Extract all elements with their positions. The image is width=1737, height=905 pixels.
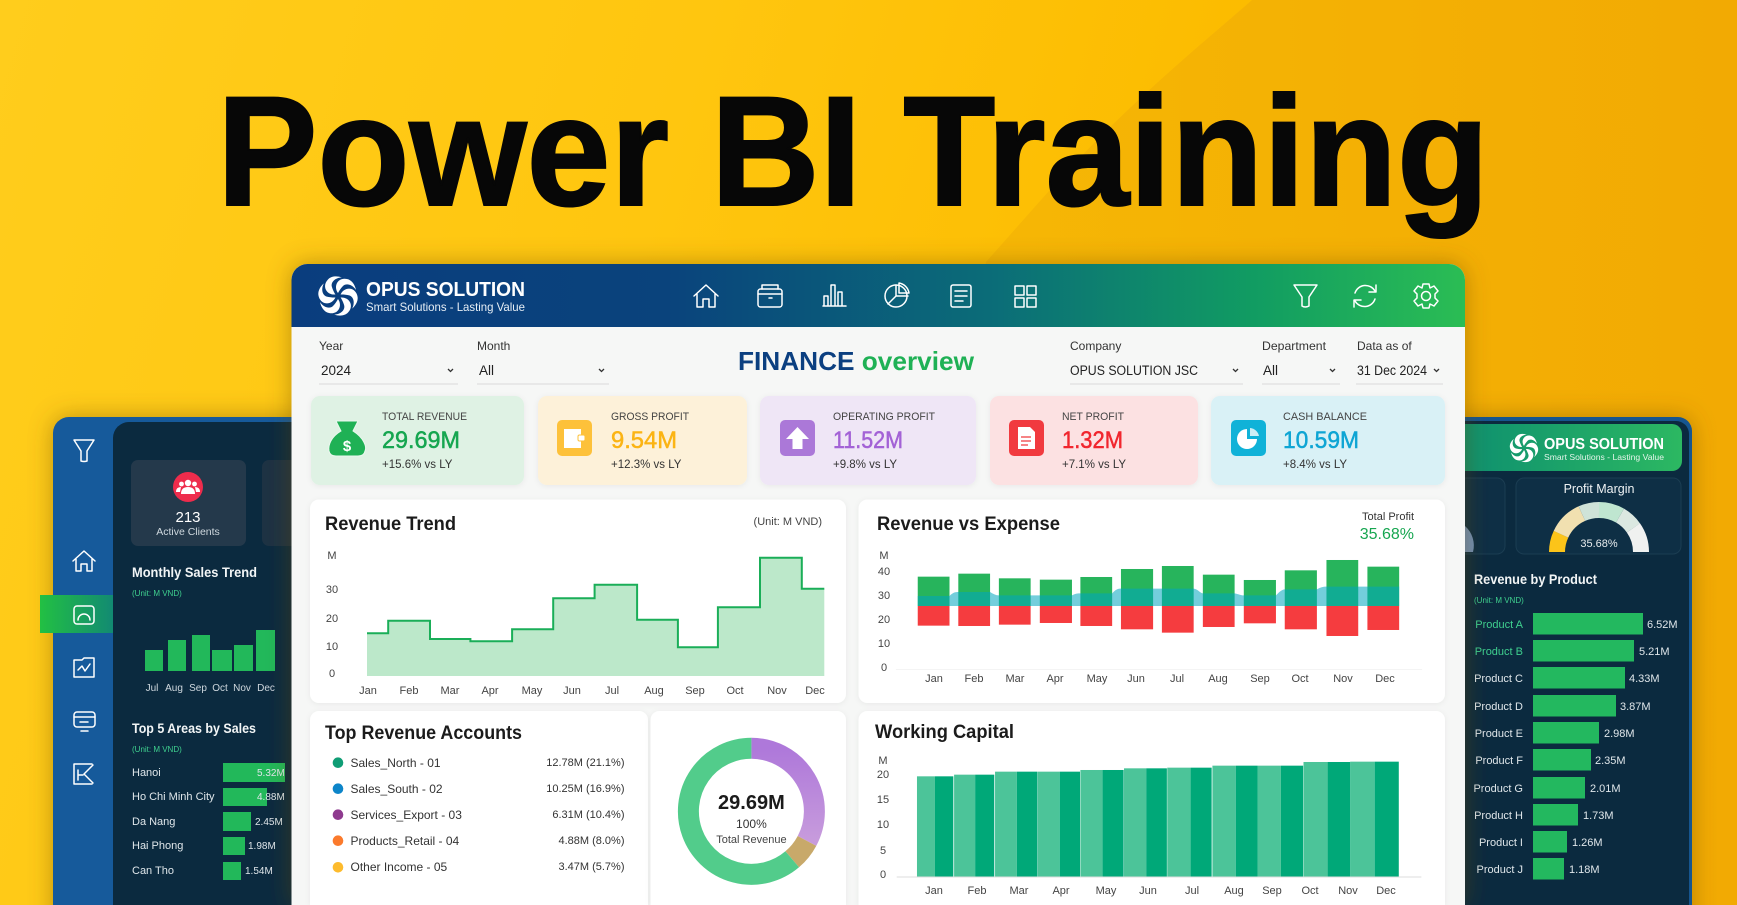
KPI: gross profit: +12.3% vs LY [611, 459, 682, 471]
filter: month [477, 339, 609, 384]
y axis labels: 40 [878, 566, 890, 578]
x axis labels: May [522, 685, 543, 697]
KPI: gross profit: 9.54M [611, 427, 677, 454]
y axis labels: 10 [877, 819, 889, 831]
KPI: gross profit [538, 396, 747, 485]
stacked bar chart [896, 560, 1422, 669]
panel: working capital [858, 711, 1445, 905]
filter: month: All [479, 363, 494, 378]
account row: sales south: 10.25M (16.9%) [546, 783, 624, 795]
filter: year [319, 339, 458, 384]
x axis labels [925, 673, 1395, 685]
brand tagline: Smart Solutions - Lasting Value [366, 300, 525, 314]
bar chart: monthly sales: Nov [233, 683, 251, 694]
KPI: net profit: NET PROFIT [1062, 411, 1124, 423]
heading: monthly sales trend: Monthly Sales Trend [132, 564, 257, 580]
filter: department: Department [1262, 339, 1327, 353]
unit note: (Unit: M VND) [132, 745, 182, 754]
bar chart: revenue by product [1473, 613, 1678, 880]
client label: Active Clients [156, 526, 220, 538]
y axis labels: 20 [326, 613, 338, 625]
bar chart: revenue by product: 3.87M [1620, 701, 1651, 713]
card: profit margin: Profit Margin [1564, 482, 1634, 496]
y axis labels: 5 [880, 845, 886, 857]
bar chart: revenue by product: 4.33M [1629, 673, 1660, 685]
account row: sales north: Sales_North - 01 [350, 756, 441, 770]
account row: services export: 6.31M (10.4%) [552, 809, 624, 821]
brand name: OPUS SOLUTION [1544, 436, 1664, 453]
panel: revenue trend [310, 500, 846, 703]
icon: list [951, 285, 971, 307]
bar chart: revenue by product: Product F [1475, 755, 1523, 767]
icon: grid [1015, 286, 1036, 307]
filter: company: Company [1070, 339, 1121, 353]
filter: data as of: 31 Dec 2024 [1357, 363, 1427, 378]
x axis labels: Mar [1006, 673, 1025, 685]
bar chart: monthly sales: Aug [165, 683, 183, 694]
bar chart: revenue by product: Product A [1475, 619, 1524, 631]
bar chart: revenue by product: 1.26M [1572, 837, 1603, 849]
y axis labels: 30 [878, 590, 890, 602]
y axis labels: 30 [326, 584, 338, 596]
y axis labels: M [327, 550, 337, 562]
bar chart: revenue by product: 5.21M [1639, 646, 1670, 658]
bar list: top areas: Can Tho [132, 865, 174, 877]
icon: filter [1294, 285, 1317, 307]
y axis labels: 10 [878, 638, 890, 650]
chart heading: Top Revenue Accounts [325, 723, 522, 744]
icon: bar chart [823, 285, 846, 306]
bar list: top areas: 2.45M [255, 817, 283, 828]
donut percent: 100% [736, 817, 767, 831]
panel: revenue donut [650, 711, 846, 905]
bar chart: revenue by product: Product C [1474, 673, 1523, 685]
icon: up arrow [780, 420, 815, 456]
x axis labels: Aug [1208, 673, 1228, 685]
x axis labels [925, 885, 1396, 897]
donut chart [688, 748, 814, 874]
x axis labels: Aug [1224, 885, 1244, 897]
icon: brand swirl [1507, 431, 1541, 465]
heading: revenue by product: Revenue by Product [1474, 571, 1597, 587]
KPI: total revenue: +15.6% vs LY [382, 459, 453, 471]
x axis labels: May [1096, 885, 1117, 897]
total profit value: 35.68% [1360, 526, 1414, 543]
bar list: top areas: 1.54M [245, 866, 273, 877]
x axis labels: Jul [1170, 673, 1184, 685]
x axis labels: May [1087, 673, 1108, 685]
card: profit margin: 35.68% [1580, 538, 1618, 550]
bar chart: revenue by product: Product H [1474, 810, 1523, 822]
account row: sales north [333, 756, 624, 770]
bar list: top areas: 4.88M [257, 792, 285, 803]
x axis labels: Dec [805, 685, 825, 697]
donut centre value: 29.69M [718, 792, 785, 814]
KPI: total revenue [311, 396, 524, 485]
client count: 213 [175, 509, 201, 526]
title: Power BI Training [217, 65, 1489, 239]
x axis labels [359, 685, 825, 697]
KPI: operating profit: +9.8% vs LY [833, 459, 897, 471]
account row: other income: 3.47M (5.7%) [558, 861, 624, 873]
y axis labels: 0 [329, 668, 335, 680]
card: profit margin [1516, 478, 1681, 554]
x axis labels: Aug [644, 685, 664, 697]
filter: department: All [1263, 363, 1278, 378]
bar chart: revenue by product: Product G [1473, 783, 1523, 795]
account row: products retail: Products_Retail - 04 [350, 834, 460, 848]
KPI: net profit [990, 396, 1198, 485]
bar chart: revenue by product: 2.35M [1595, 755, 1626, 767]
account row: sales south: Sales_South - 02 [350, 782, 443, 796]
bar chart: revenue by product: 2.98M [1604, 728, 1635, 740]
active sidebar highlight [40, 595, 113, 633]
x axis labels: Oct [726, 685, 744, 697]
x axis labels: Mar [441, 685, 460, 697]
icon: document [1009, 420, 1044, 456]
x axis labels: Nov [767, 685, 787, 697]
KPI: operating profit: OPERATING PROFIT [833, 411, 935, 423]
y axis labels [326, 550, 338, 680]
x axis labels: Oct [1301, 885, 1319, 897]
KPI: cash balance: 10.59M [1283, 427, 1359, 454]
KPI: operating profit [760, 396, 976, 485]
account row: sales south [333, 782, 624, 796]
bar list: top areas: 5.32M [257, 768, 285, 779]
bar chart: revenue by product: 1.73M [1583, 810, 1614, 822]
unit note: (Unit: M VND) [132, 589, 182, 598]
x axis labels: Jan [925, 673, 943, 685]
KPI: gross profit: GROSS PROFIT [611, 411, 689, 423]
y axis labels [877, 755, 889, 881]
icon: dashboard gauge [74, 606, 94, 624]
bar chart: revenue by product: Product I [1479, 837, 1523, 849]
icon: money bag: $ [343, 438, 352, 455]
bar list: top areas: Ho Chi Minh City [132, 791, 215, 803]
icon: brand swirl [314, 272, 362, 320]
icon: home [73, 551, 95, 571]
unit note: (Unit: M VND) [754, 516, 822, 528]
y axis labels: 20 [877, 769, 889, 781]
bar chart [897, 762, 1421, 877]
chart heading: Revenue Trend [325, 514, 456, 535]
x axis labels: Jun [1139, 885, 1157, 897]
KPI: total revenue: 29.69M [382, 427, 460, 454]
icon: briefcase [758, 285, 782, 307]
icon: wallet [557, 420, 592, 456]
step area chart [367, 558, 824, 676]
icon: pie chart [885, 283, 909, 307]
KPI: net profit: +7.1% vs LY [1062, 459, 1126, 471]
y axis labels: 0 [881, 662, 887, 674]
KPI: net profit: 1.32M [1062, 427, 1123, 454]
y axis labels: 0 [880, 869, 886, 881]
x axis labels: Oct [1291, 673, 1309, 685]
account row: products retail [333, 834, 624, 848]
bar chart: revenue by product: Product B [1475, 646, 1523, 658]
bar chart: monthly sales: Jul [146, 683, 158, 694]
x axis labels: Jun [1127, 673, 1145, 685]
bar list: top areas: Da Nang [132, 816, 175, 828]
x axis labels: Mar [1010, 885, 1029, 897]
gauge [1557, 510, 1641, 552]
unit note: (Unit: M VND) [1474, 596, 1524, 605]
dashboard heading: FINANCE overview [738, 346, 975, 376]
card: active clients [131, 460, 246, 546]
x axis labels: Feb [400, 685, 418, 697]
KPI: cash balance: CASH BALANCE [1283, 411, 1367, 423]
filter: data as of [1356, 339, 1443, 384]
icon: pie [1231, 420, 1266, 456]
icon: money bag [329, 421, 366, 456]
filter: month: Month [477, 339, 510, 353]
panel: left dark dashboard [40, 417, 320, 905]
y axis labels: 10 [326, 641, 338, 653]
x axis labels: Feb [968, 885, 986, 897]
x axis labels: Apr [1046, 673, 1064, 685]
brand bar [1440, 424, 1682, 471]
card: partial second card [262, 460, 302, 546]
bar chart: revenue by product: 1.18M [1569, 864, 1600, 876]
icon: home [694, 285, 718, 307]
donut caption: Total Revenue [716, 834, 787, 846]
chart heading: Revenue vs Expense [877, 514, 1060, 535]
KPI: operating profit: 11.52M [833, 427, 903, 454]
bar chart: monthly sales: Dec [257, 683, 275, 694]
filter: department [1262, 339, 1340, 384]
y axis labels: 20 [878, 614, 890, 626]
filter: company: OPUS SOLUTION JSC [1070, 363, 1198, 378]
bar list: top areas [132, 763, 285, 880]
bar chart: revenue by product: Product E [1475, 728, 1523, 740]
icon: monitor [74, 712, 95, 731]
header bar [292, 264, 1465, 327]
y axis labels: 15 [877, 794, 889, 806]
x axis labels: Sep [1262, 885, 1282, 897]
account row: sales north: 12.78M (21.1%) [546, 757, 624, 769]
icon: report [74, 764, 93, 784]
brand name: OPUS SOLUTION [366, 279, 525, 301]
account row: other income [333, 860, 624, 874]
icon: filter [74, 440, 94, 462]
icon: analysis chart [74, 658, 94, 677]
x axis labels: Dec [1376, 885, 1396, 897]
account row: other income: Other Income - 05 [350, 860, 448, 874]
KPI: cash balance: +8.4% vs LY [1283, 459, 1347, 471]
panel: top revenue accounts [310, 711, 648, 905]
x axis labels: Nov [1333, 673, 1353, 685]
x axis labels: Sep [1250, 673, 1270, 685]
chart heading: Working Capital [875, 722, 1014, 743]
x axis labels: Sep [685, 685, 705, 697]
bar chart: monthly sales: Oct [212, 683, 228, 694]
bar list: top areas: Hai Phong [132, 840, 183, 852]
KPI: total revenue: TOTAL REVENUE [382, 411, 467, 423]
filter: company [1070, 339, 1243, 384]
account row: services export [333, 808, 624, 822]
bar list: top areas: 1.98M [248, 841, 276, 852]
panel: right dark dashboard [1420, 417, 1692, 905]
bar chart: monthly sales: Sep [189, 683, 207, 694]
bar chart: revenue by product: Product D [1474, 701, 1523, 713]
heading: top areas: Top 5 Areas by Sales [132, 720, 256, 736]
x axis labels: Apr [481, 685, 499, 697]
icon: refresh [1354, 285, 1376, 307]
x axis labels: Jan [925, 885, 943, 897]
filter: data as of: Data as of [1357, 339, 1412, 353]
total profit label: Total Profit [1362, 511, 1414, 523]
x axis labels: Apr [1052, 885, 1070, 897]
icon: clients [173, 472, 203, 502]
account row: products retail: 4.88M (8.0%) [558, 835, 624, 847]
brand tagline: Smart Solutions - Lasting Value [1544, 452, 1664, 462]
y axis labels: M [878, 755, 888, 767]
x axis labels: Jan [359, 685, 377, 697]
panel: revenue vs expense [858, 500, 1445, 703]
x axis labels: Feb [965, 673, 983, 685]
x axis labels: Jul [605, 685, 619, 697]
KPI: cash balance [1211, 396, 1445, 485]
y axis labels [878, 550, 890, 674]
account row: services export: Services_Export - 03 [350, 808, 462, 822]
filter: year: Year [319, 339, 343, 353]
bar chart: revenue by product: 2.01M [1590, 783, 1621, 795]
x axis labels: Jun [563, 685, 581, 697]
filter: year: 2024 [321, 363, 352, 378]
panel: main finance dashboard [292, 264, 1465, 905]
x axis labels: Jul [1185, 885, 1199, 897]
y axis labels: M [879, 550, 889, 562]
card: partial gauge [1420, 478, 1505, 554]
icon: settings gear [1414, 284, 1438, 308]
bar list: top areas: Hanoi [132, 767, 161, 779]
bar chart: revenue by product: Product J [1477, 864, 1523, 876]
bar chart: revenue by product: 6.52M [1647, 619, 1678, 631]
bar chart: monthly sales [145, 630, 275, 694]
x axis labels: Nov [1338, 885, 1358, 897]
x axis labels: Dec [1375, 673, 1395, 685]
